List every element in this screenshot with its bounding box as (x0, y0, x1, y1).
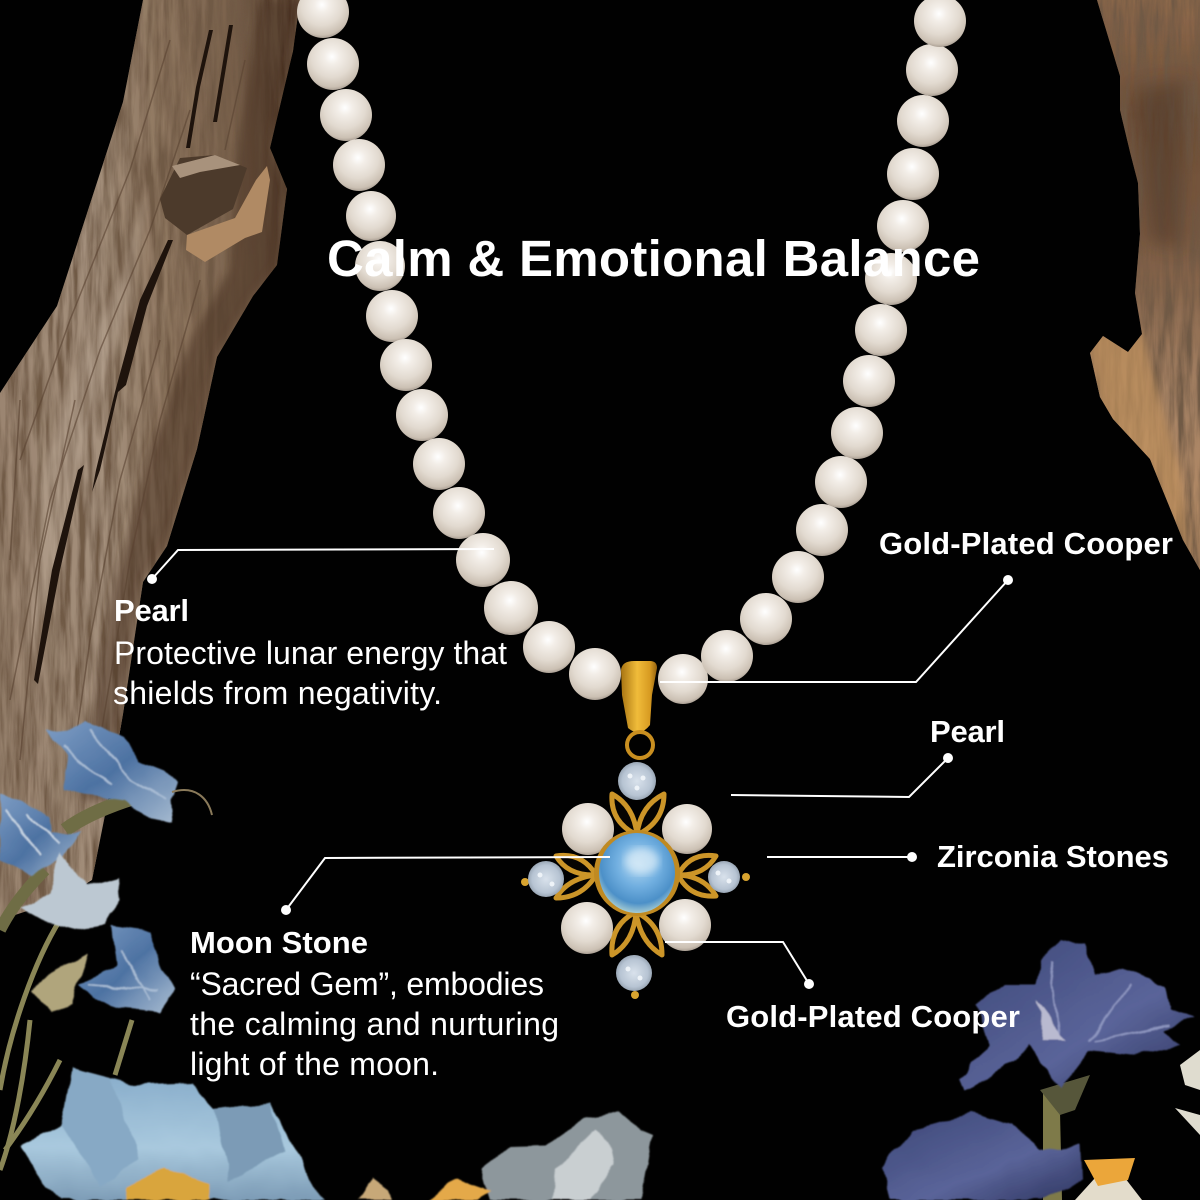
gold end beads (521, 873, 750, 999)
right driftwood (1085, 0, 1200, 570)
leader line (767, 852, 917, 862)
leader line (147, 549, 494, 584)
leader line (665, 942, 814, 989)
description (190, 966, 559, 1082)
left driftwood (0, 0, 300, 920)
callout: gold-plated copper top (660, 526, 1173, 682)
blossom stem curl (172, 790, 212, 815)
leader line (731, 753, 953, 797)
large pale blue flower bottom-left (20, 1068, 325, 1200)
description: shields from negativity. (113, 675, 442, 711)
description (113, 635, 507, 711)
blue blossom lower (80, 925, 175, 1012)
gold bail (621, 661, 657, 758)
title: Calm & Emotional Balance (327, 230, 980, 287)
callout: moon stone (190, 857, 610, 1082)
label: Moon Stone (190, 925, 368, 960)
left flowers (0, 722, 212, 1170)
blue blossom top (46, 722, 178, 822)
pale blossom (20, 852, 120, 930)
label: Gold-Plated Cooper (879, 526, 1173, 561)
wood cracks (34, 25, 233, 684)
navy flower bottom-right (882, 938, 1200, 1200)
callout: gold-plated copper bottom (665, 942, 1020, 1034)
zirconia stones (528, 762, 740, 991)
pendant (521, 661, 750, 999)
dried bud (30, 952, 88, 1010)
moonstone (594, 830, 680, 916)
description: Protective lunar energy that (114, 635, 507, 671)
pearl necklace strand (297, 0, 966, 704)
description: light of the moon. (190, 1046, 439, 1082)
gold filigree cross (556, 794, 716, 955)
label: Gold-Plated Cooper (726, 999, 1020, 1034)
callout: pearl on strand (113, 549, 507, 711)
label: Zirconia Stones (937, 839, 1169, 874)
label: Pearl (114, 593, 189, 628)
leader line (281, 857, 610, 915)
pendant pearls (561, 803, 712, 954)
bottom center pale flower (358, 1110, 652, 1200)
wood knot (160, 155, 270, 262)
callout: pearl on pendant (731, 714, 1005, 797)
description: the calming and nurturing (190, 1006, 559, 1042)
callout: zirconia stones (767, 839, 1169, 874)
label: Pearl (930, 714, 1005, 749)
leader line (660, 575, 1013, 682)
description: “Sacred Gem”, embodies (190, 966, 544, 1002)
blue blossom left (0, 795, 82, 875)
stems (0, 788, 170, 1170)
